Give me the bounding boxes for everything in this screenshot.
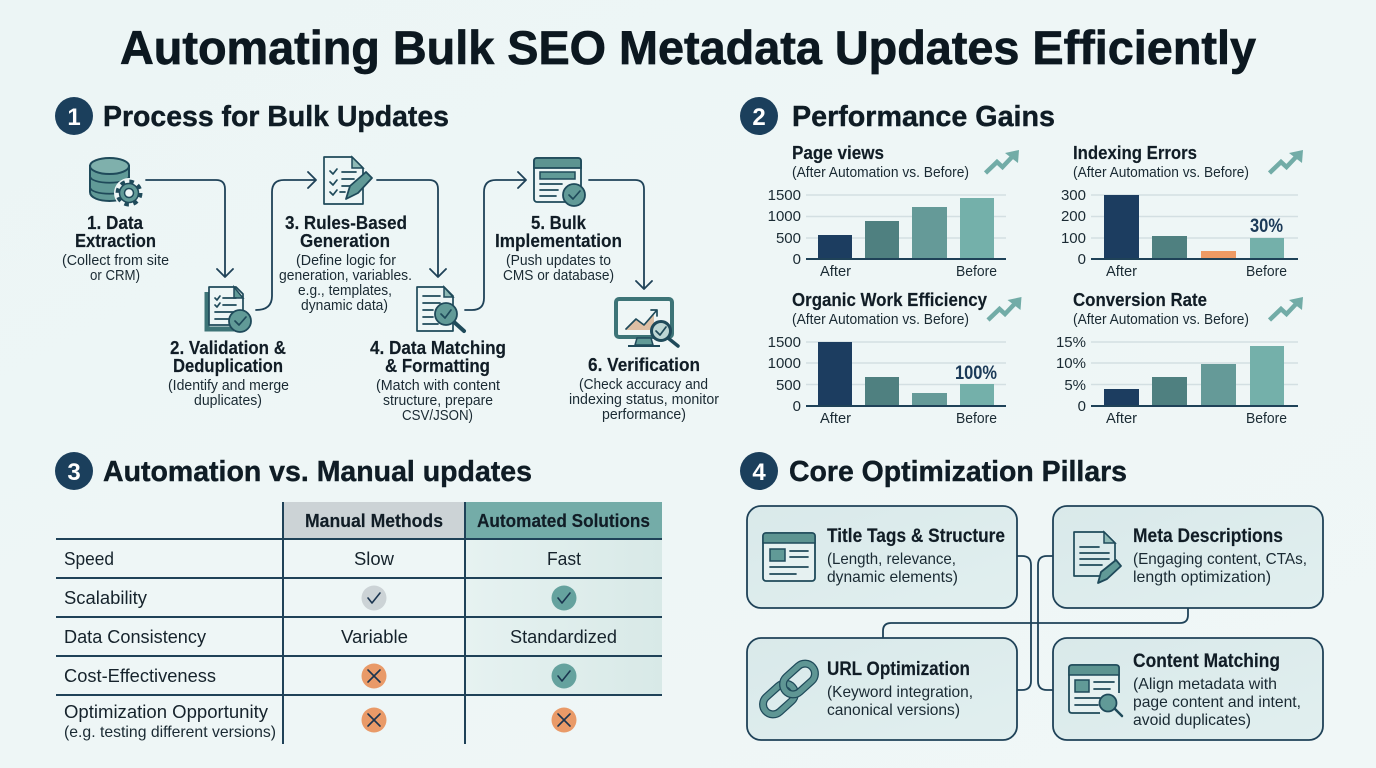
- comparison table: Optimization Opportunity: [64, 701, 269, 722]
- icon: cross orange: [362, 664, 386, 688]
- card: content matching: [1053, 638, 1323, 740]
- panel: core optimization pillars: [740, 452, 1323, 740]
- card: content matching: avoid duplicates): [1133, 712, 1251, 729]
- icon: trend arrow: [1270, 150, 1303, 173]
- icon: checklist with pencil: [324, 157, 372, 204]
- chart: organic work efficiency: 1000: [768, 355, 801, 372]
- step 3 text: 3. Rules-Based: [285, 212, 407, 233]
- card: meta descriptions: [1053, 506, 1323, 608]
- icon: check grey: [362, 586, 386, 610]
- step 2 text: 2. Validation &: [170, 337, 286, 358]
- step 2 text: [168, 337, 289, 409]
- comparison table: Cost-Effectiveness: [64, 665, 216, 686]
- card: url optimization: (Keyword integration,: [827, 684, 973, 701]
- heading: automation vs manual: Automation vs. Manual updates: [103, 456, 532, 488]
- step 5 text: [495, 212, 622, 284]
- chart: page views: 1000: [768, 208, 801, 225]
- icon: trend arrow: [1270, 297, 1303, 320]
- icon: document with magnifier: [417, 287, 464, 331]
- step 1 text: or CRM): [90, 268, 140, 284]
- icon: document with check: [207, 287, 251, 332]
- comparison table: Fast: [547, 548, 581, 569]
- card: title tags: [747, 506, 1017, 608]
- icon: check teal: [552, 664, 576, 688]
- step 1 text: 1. Data: [87, 212, 144, 233]
- card: meta descriptions: length optimization): [1133, 569, 1271, 586]
- chart: indexing errors: 300: [1061, 187, 1086, 204]
- step 5 text: CMS or database): [503, 268, 614, 284]
- step 5 text: (Push updates to: [506, 253, 611, 269]
- arrow: step 3 to 4: [377, 180, 446, 277]
- comparison table: Variable: [341, 626, 408, 647]
- chart: page views: Before: [956, 263, 997, 280]
- comparison table: [56, 502, 662, 744]
- chart: page views: [768, 143, 1019, 280]
- chart: page views: 1500: [768, 187, 801, 204]
- icon: browser window with check: [534, 158, 585, 206]
- chart: indexing errors: [1061, 143, 1303, 280]
- card: url optimization: URL Optimization: [827, 659, 970, 680]
- arrow: step 4 to 5: [465, 172, 526, 310]
- chart: organic work efficiency: 0: [793, 398, 801, 415]
- icon: chain link: [759, 660, 819, 718]
- chart: organic work efficiency: Before: [956, 410, 997, 427]
- chart: conversion rate: Before: [1246, 410, 1287, 427]
- chart: conversion rate: Conversion Rate: [1073, 290, 1207, 310]
- heading: performance: 2: [752, 104, 766, 131]
- title: Automating Bulk SEO Metadata Updates Efficiently: [120, 21, 1256, 74]
- heading: pillars: 4: [752, 459, 766, 486]
- comparison table: Data Consistency: [64, 626, 207, 647]
- panel: automation vs manual: [55, 452, 662, 744]
- step 3 text: [279, 212, 412, 314]
- connectors between pillars: [883, 556, 1188, 690]
- icon: page with magnifier: [1069, 665, 1122, 716]
- chart: organic work efficiency: Organic Work Efficiency: [792, 290, 987, 310]
- step 3 text: e.g., templates,: [298, 283, 392, 299]
- chart: organic work efficiency: After: [820, 410, 851, 427]
- chart: conversion rate: [1056, 290, 1303, 427]
- icon: trend arrow: [986, 150, 1019, 173]
- panel: process for bulk updates: [55, 97, 719, 424]
- card: meta descriptions: (Engaging content, CTAs,: [1133, 551, 1307, 568]
- chart: indexing errors: Indexing Errors: [1073, 143, 1197, 163]
- card: meta descriptions: Meta Descriptions: [1133, 526, 1283, 547]
- step 5 text: 5. Bulk: [531, 212, 587, 233]
- chart: page views: (After Automation vs. Before): [792, 165, 969, 181]
- step 2 text: (Identify and merge: [168, 378, 289, 394]
- heading: process: Process for Bulk Updates: [103, 101, 449, 133]
- card: content matching: page content and intent,: [1133, 694, 1301, 711]
- chart: indexing errors: Before: [1246, 263, 1287, 280]
- step 3 text: Generation: [300, 230, 390, 251]
- arrow: step 1 to 2: [146, 180, 233, 277]
- icon: check teal: [552, 586, 576, 610]
- step 4 text: CSV/JSON): [402, 408, 473, 424]
- heading: pillars: Core Optimization Pillars: [789, 456, 1127, 488]
- chart: conversion rate: 10%: [1056, 355, 1086, 372]
- icon: monitor with chart and magnifier: [616, 299, 678, 346]
- comparison table: (e.g. testing different versions): [64, 724, 276, 741]
- card: content matching: (Align metadata with: [1133, 676, 1277, 693]
- step 4 text: [370, 337, 506, 424]
- step 3 text: (Define logic for: [296, 253, 396, 269]
- icon: cross orange: [362, 708, 386, 732]
- chart: indexing errors: After: [1106, 263, 1137, 280]
- chart: indexing errors: 200: [1061, 208, 1086, 225]
- chart: organic work efficiency: (After Automation vs. Before): [792, 312, 969, 328]
- icon: database with gear: [90, 158, 144, 208]
- chart: page views: 500: [776, 230, 801, 247]
- step 2 text: Deduplication: [173, 355, 283, 376]
- card: title tags: dynamic elements): [827, 569, 958, 586]
- icon: document with pencil: [1074, 532, 1121, 583]
- chart: organic work efficiency: 500: [776, 377, 801, 394]
- card: content matching: Content Matching: [1133, 651, 1280, 672]
- step 3 text: dynamic data): [301, 298, 388, 314]
- comparison table: Manual Methods: [305, 511, 443, 531]
- chart: conversion rate: 5%: [1064, 377, 1086, 394]
- chart: organic work efficiency: 1500: [768, 334, 801, 351]
- heading: automation vs manual: 3: [67, 459, 81, 486]
- step 1 text: Extraction: [75, 230, 156, 251]
- chart: indexing errors: (After Automation vs. Before): [1073, 165, 1249, 181]
- step 6 text: indexing status, monitor: [569, 392, 719, 408]
- chart: page views: After: [820, 263, 851, 280]
- step 6 text: (Check accuracy and: [579, 377, 708, 393]
- icon: cross orange: [552, 708, 576, 732]
- icon: trend arrow: [988, 297, 1022, 320]
- arrow: step 2 to 3: [256, 172, 316, 310]
- chart: conversion rate: After: [1106, 410, 1137, 427]
- step 4 text: structure, prepare: [383, 393, 493, 409]
- comparison table: Slow: [354, 548, 395, 569]
- arrow: step 5 to 6: [589, 180, 652, 289]
- heading: performance: Performance Gains: [792, 101, 1055, 133]
- step 1 text: [62, 212, 169, 284]
- comparison table: Standardized: [510, 626, 617, 647]
- chart: indexing errors: 0: [1078, 251, 1086, 268]
- step 1 text: (Collect from site: [62, 253, 169, 269]
- step 4 text: (Match with content: [376, 378, 500, 394]
- chart: indexing errors: 30%: [1250, 216, 1283, 237]
- chart: page views: 0: [793, 251, 801, 268]
- chart: indexing errors: 100: [1061, 230, 1086, 247]
- chart: conversion rate: (After Automation vs. Before): [1073, 312, 1249, 328]
- card: url optimization: canonical versions): [827, 702, 960, 719]
- step 3 text: generation, variables.: [279, 268, 412, 284]
- comparison table: Automated Solutions: [477, 511, 650, 531]
- step 4 text: 4. Data Matching: [370, 337, 506, 358]
- comparison table: Scalability: [64, 587, 148, 608]
- heading: process: 1: [67, 104, 81, 131]
- chart: organic work efficiency: 100%: [955, 363, 997, 384]
- card: url optimization: [747, 638, 1017, 740]
- icon: browser page: [763, 533, 815, 581]
- step 6 text: performance): [602, 407, 686, 423]
- chart: conversion rate: 0: [1078, 398, 1086, 415]
- chart: page views: Page views: [792, 143, 884, 163]
- step 4 text: & Formatting: [385, 355, 490, 376]
- chart: conversion rate: 15%: [1056, 334, 1086, 351]
- panel: performance gains: [740, 97, 1303, 427]
- heading: performance: [740, 97, 1055, 135]
- card: title tags: Title Tags & Structure: [827, 526, 1005, 547]
- step 6 text: [569, 354, 719, 423]
- step 6 text: 6. Verification: [588, 354, 700, 375]
- step 2 text: duplicates): [194, 393, 262, 409]
- card: title tags: (Length, relevance,: [827, 551, 956, 568]
- comparison table: Speed: [64, 548, 114, 569]
- step 5 text: Implementation: [495, 230, 622, 251]
- chart: organic work efficiency: [768, 290, 1022, 427]
